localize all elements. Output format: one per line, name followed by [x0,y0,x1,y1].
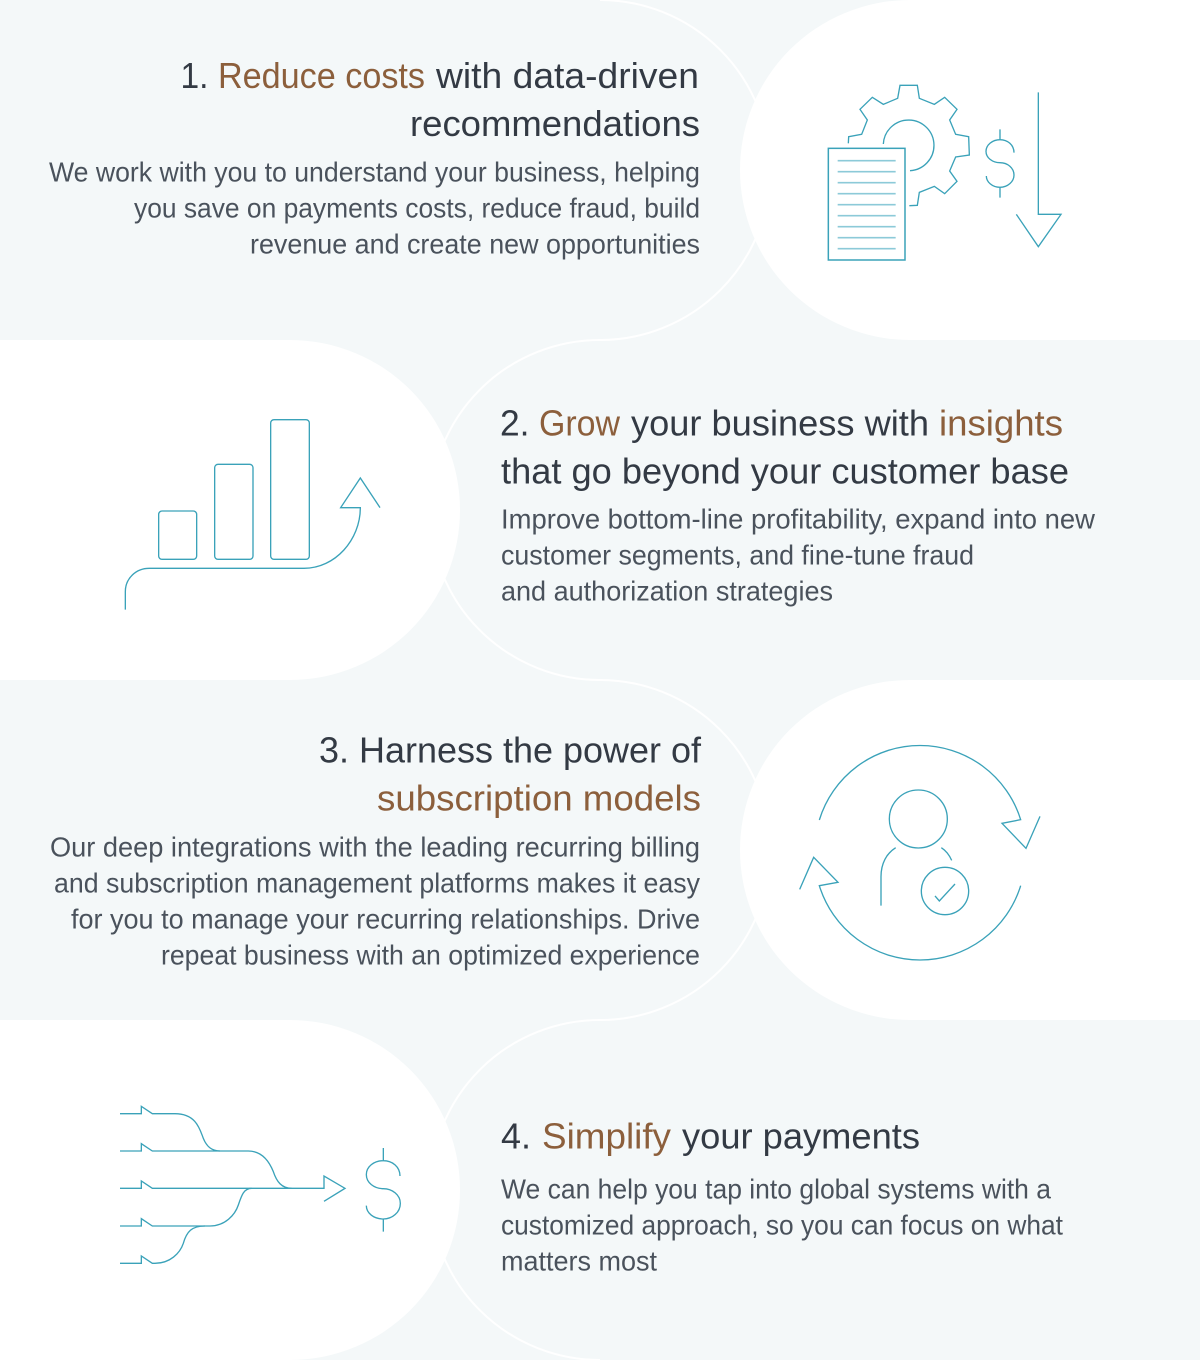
panel: white pill 2 [0,340,460,680]
section 3 heading: subscription models [377,777,701,818]
panel: white pill 3 [740,680,1200,1020]
section 1 heading: 1. [180,55,208,96]
section 2 text: and authorization strategies [501,575,833,606]
section 3 text: repeat business with an optimized experience [161,939,700,970]
section 2 heading [500,402,1069,491]
section 4 heading: Simplify [542,1115,671,1156]
section 3 text: and subscription management platforms makes it easy [54,867,700,898]
section 2 heading: that go beyond your customer base [501,450,1069,491]
section 1 heading: Reduce costs [218,55,425,96]
section 1 text: We work with you to understand your business, helping [49,156,700,187]
section 1 heading: with data-driven [435,55,699,96]
section 2 text [501,503,1096,606]
section 4 heading [501,1115,920,1156]
section 1 text [49,156,700,259]
section 3 text: Our deep integrations with the leading recurring billing [50,831,700,862]
section 4 text: We can help you tap into global systems with a [501,1173,1051,1204]
section 2 text: customer segments, and fine-tune fraud [501,539,974,570]
section 2 heading: insights [939,402,1063,443]
icon: gear, document, dollar and down arrow [828,85,1061,260]
section 3 text: for you to manage your recurring relationships. Drive [71,903,700,934]
section 2 heading: Grow [539,402,621,443]
icon: merging arrows to dollar [120,1106,400,1263]
section 4 text: customized approach, so you can focus on what [501,1209,1063,1240]
panel: white pill 1 [740,0,1200,340]
section 3 heading: 3. Harness the power of [319,729,702,770]
section 1 heading [180,55,700,144]
section 1 text: revenue and create new opportunities [250,228,700,259]
panel: white pill 4 [0,1020,460,1360]
section 4 text [501,1173,1063,1276]
section 4 heading: your payments [682,1115,920,1156]
section 2 heading: your business with [631,402,929,443]
icon: person with check inside circular arrows [800,746,1040,960]
section 3 heading [319,729,702,818]
section 3 text [50,831,700,970]
section 4 heading: 4. [501,1115,531,1156]
section 1 text: you save on payments costs, reduce fraud, build [134,192,700,223]
section 1 heading: recommendations [410,103,700,144]
section 4 text: matters most [501,1245,657,1276]
icon: rising bar chart with arrow [125,420,380,610]
section 2 heading: 2. [500,402,530,443]
section 2 text: Improve bottom-line profitability, expand into new [501,503,1096,534]
